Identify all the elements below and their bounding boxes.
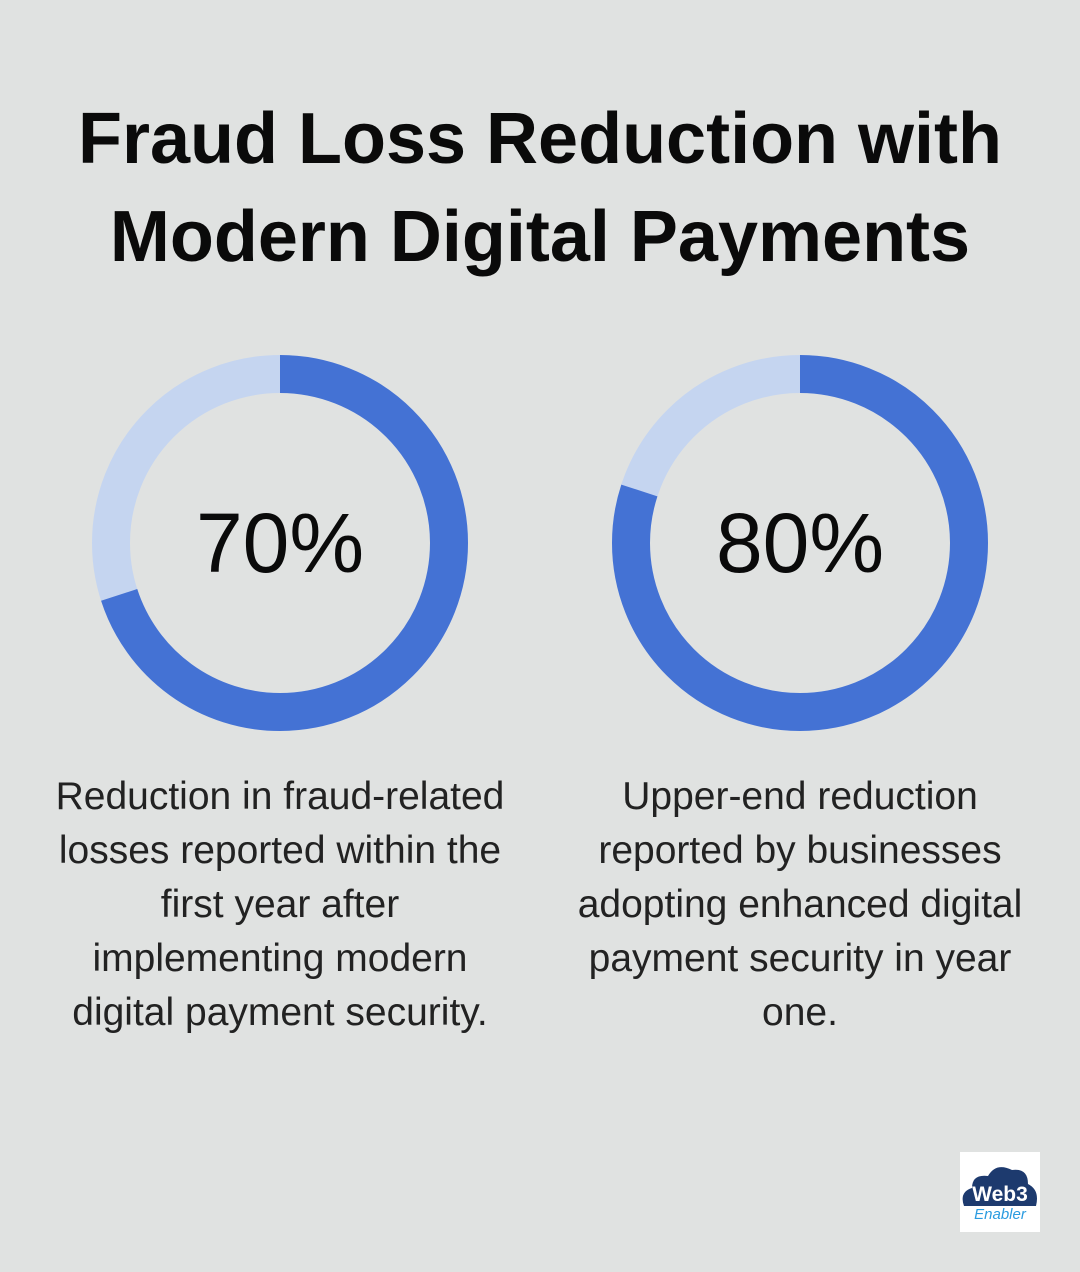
text: right description: Upper-end reduction	[622, 775, 978, 818]
text: right description: payment security in year	[589, 937, 1011, 980]
text: left description: first year after	[161, 883, 399, 926]
text: right description: one.	[762, 991, 838, 1034]
title	[78, 99, 1002, 277]
title: Fraud Loss Reduction with	[78, 99, 1002, 179]
donut chart: 70%: 70%	[196, 496, 364, 590]
text: left description: implementing modern	[92, 937, 468, 980]
logo: Enabler	[974, 1206, 1027, 1223]
text: left description: Reduction in fraud-related	[56, 775, 504, 818]
title: Modern Digital Payments	[110, 197, 970, 277]
text: left description: losses reported within the	[59, 829, 501, 872]
text: right description	[578, 775, 1022, 1034]
logo: Web3	[972, 1183, 1028, 1206]
text: right description: adopting enhanced digital	[578, 883, 1022, 926]
donut chart: 80%: 80%	[716, 496, 884, 590]
text: right description: reported by businesses	[598, 829, 1002, 872]
text: left description	[56, 775, 504, 1034]
donut chart: 80%	[612, 355, 988, 731]
donut chart: 70%	[92, 355, 468, 731]
text: left description: digital payment security.	[72, 991, 488, 1034]
logo	[960, 1152, 1040, 1232]
